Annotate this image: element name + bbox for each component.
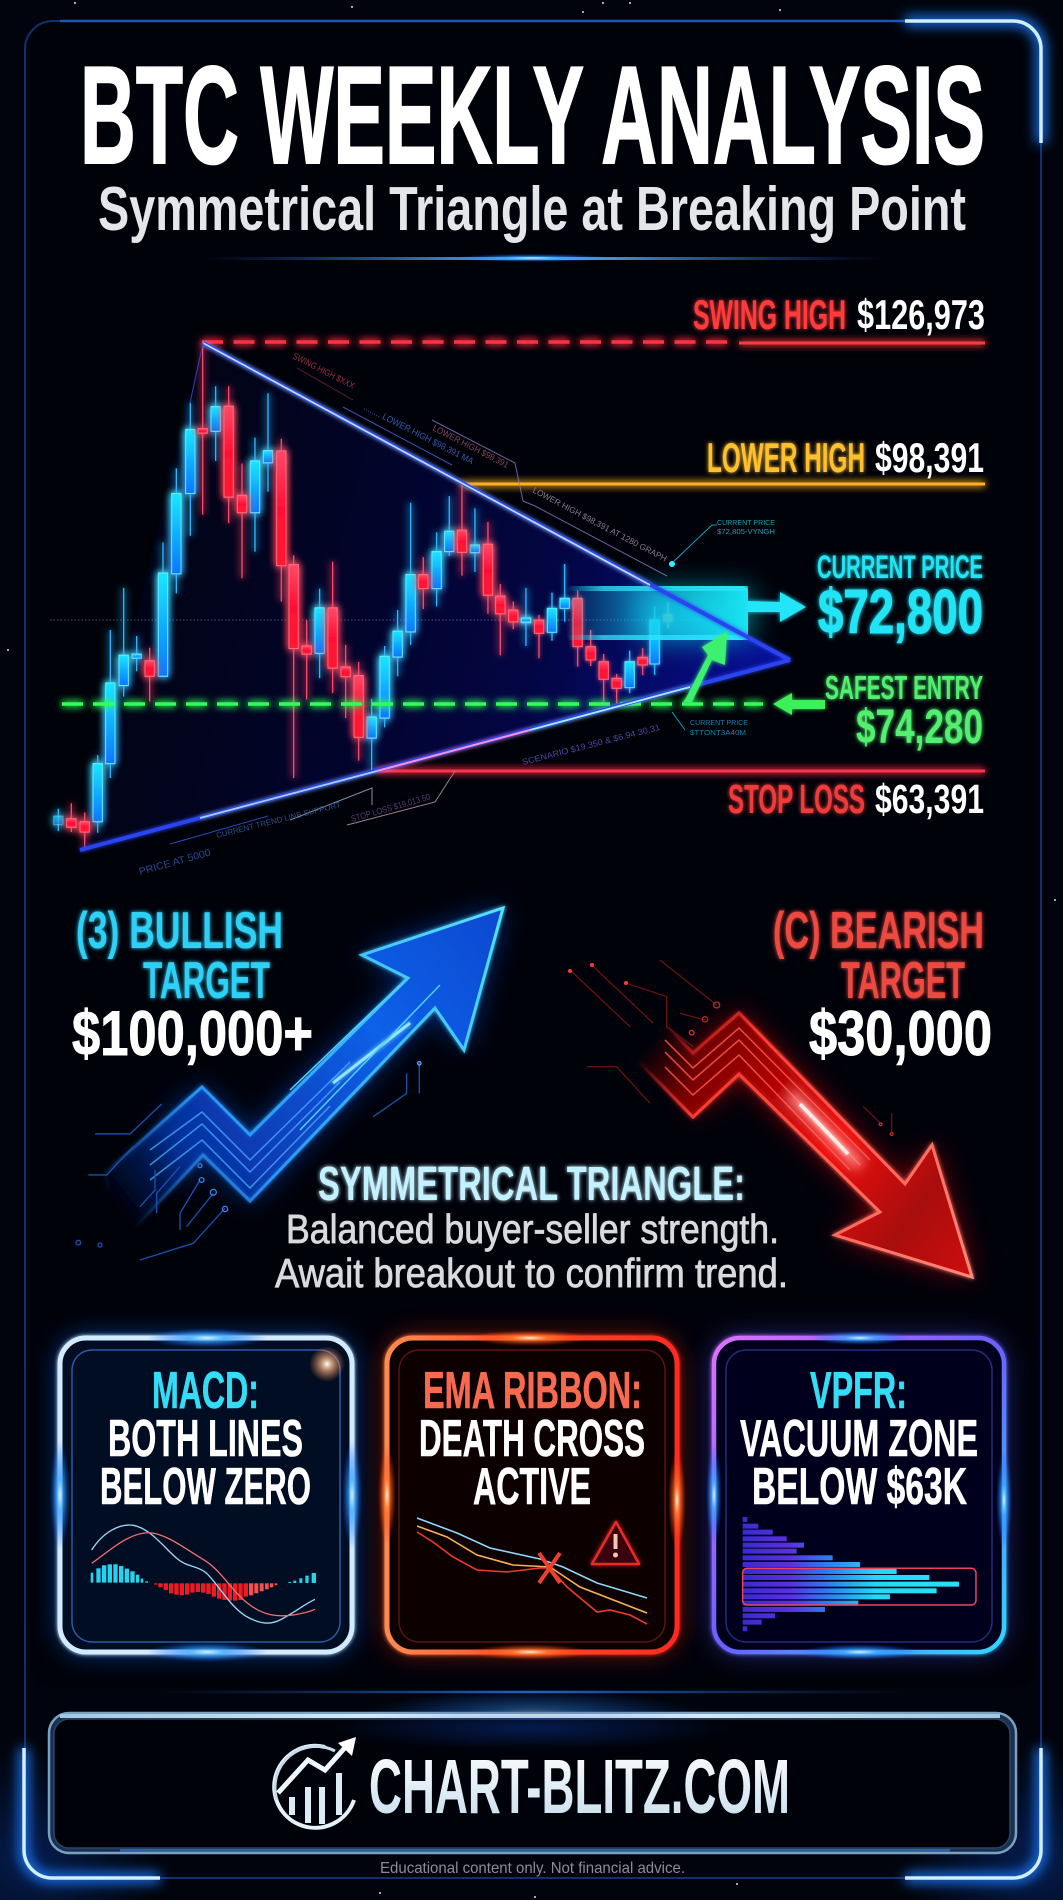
chart micro annotations: PRICE AT 5000: [138, 847, 213, 878]
EMA text: [419, 1362, 645, 1516]
footer banner: [49, 1690, 1016, 1853]
card: MACD: [50, 1328, 362, 1662]
EMA chart: [417, 1518, 647, 1624]
label: safest entry: $74,280: [856, 701, 983, 754]
MACD text: [100, 1362, 311, 1516]
label: current price: [817, 549, 983, 647]
bearish target text: TARGET: [841, 952, 965, 1010]
chart micro annotations: LOWER HIGH $98,391: [431, 423, 510, 470]
chart micro annotations: STOP LOSS $19,013.50: [350, 792, 431, 824]
green arrow to entry line: [773, 693, 825, 715]
card: VPFR: [706, 1331, 1012, 1660]
bearish target text: $30,000: [809, 999, 992, 1069]
EMA text: EMA RIBBON:: [423, 1362, 642, 1420]
symmetrical triangle text: SYMMETRICAL TRIANGLE:: [318, 1158, 745, 1211]
red candles group 1: [67, 343, 518, 847]
chart micro annotations: SCENARIO $19.350 & $6.94 30.31: [521, 722, 661, 767]
divider: [203, 254, 881, 262]
chart micro annotations: CURRENT TREND LINE SUPPORT: [215, 800, 342, 840]
bullish target text: TARGET: [143, 952, 270, 1010]
label: lower high: $98,391: [875, 434, 984, 481]
MACD text: MACD:: [152, 1362, 259, 1420]
MACD text: BELOW ZERO: [100, 1458, 311, 1516]
candles group 2: [521, 564, 673, 703]
EMA text: ACTIVE: [473, 1458, 591, 1516]
level: swing high dashed line: [202, 342, 985, 343]
price chart: [50, 342, 985, 878]
chart micro annotations: $TTONT3A40M: [690, 728, 746, 737]
triangle fill: [80, 343, 790, 850]
VPFR text: VPFR:: [810, 1362, 907, 1420]
icon: chart logo: [274, 1737, 356, 1828]
volume profile bars: [743, 1517, 976, 1631]
bullish target text: (3) BULLISH: [76, 902, 283, 960]
card: EMA ribbon: [378, 1330, 686, 1660]
chart micro annotations: $72,805-VYNGH: [717, 527, 775, 536]
lens flare: [309, 1346, 345, 1382]
label: current price: $72,800: [818, 578, 983, 647]
label: stop loss: STOP LOSS: [728, 776, 865, 822]
chart micro annotations: [138, 351, 775, 878]
bullish target text: $100,000+: [72, 999, 313, 1069]
level: lower high line: [462, 482, 985, 486]
chart micro annotations: CURRENT PRICE: [690, 718, 748, 727]
chart micro annotations: LOWER HIGH $98,391 AT 1280 GRAPH: [531, 485, 669, 563]
vacuum zone highlight: [743, 1568, 976, 1605]
label: lower high: LOWER HIGH: [707, 434, 865, 481]
triangle upper trendline: [203, 343, 790, 660]
bullish arrow: [76, 908, 503, 1260]
symmetrical triangle text: Await breakout to confirm trend.: [275, 1250, 788, 1296]
circuit traces red: [570, 960, 893, 1135]
dotted current price line: [50, 619, 700, 621]
chart micro annotations: SWING HIGH $XXX: [291, 351, 356, 391]
triangle lower trendline: [80, 660, 790, 850]
VPFR text: [740, 1362, 978, 1516]
level: stop loss line: [377, 770, 985, 772]
label: stop loss: $63,391: [875, 776, 984, 822]
label: safest entry: [825, 669, 983, 754]
green arrow up into zone: [683, 632, 727, 702]
bearish target text: [773, 902, 992, 1069]
chart micro annotations: CURRENT PRICE: [717, 518, 775, 527]
chart micro annotations: ........ LOWER HIGH $98,391 MA: [362, 402, 475, 466]
current price zone: [567, 586, 750, 640]
warning icon: [592, 1522, 639, 1564]
safest entry dashed line: [62, 702, 763, 706]
blue candles group 1: [54, 386, 531, 833]
website text: CHART-BLITZ.COM: [369, 1744, 790, 1830]
bullish target text: [72, 902, 313, 1069]
bearish arrow: [568, 960, 972, 1277]
symmetrical triangle text: Balanced buyer-seller strength.: [286, 1206, 779, 1252]
cyan arrow to current price: [748, 592, 806, 622]
symmetrical triangle text: [275, 1158, 788, 1296]
MACD chart: [91, 1525, 316, 1623]
peak connector: [190, 343, 203, 403]
MACD text: BOTH LINES: [108, 1410, 303, 1468]
label: swing high: $126,973: [857, 291, 985, 338]
cross marker: [539, 1553, 560, 1583]
disclaimer: Educational content only. Not financial advice.: [380, 1860, 685, 1877]
EMA text: DEATH CROSS: [419, 1410, 645, 1468]
circuit traces: [76, 1062, 421, 1260]
label: swing high: SWING HIGH: [693, 291, 846, 338]
